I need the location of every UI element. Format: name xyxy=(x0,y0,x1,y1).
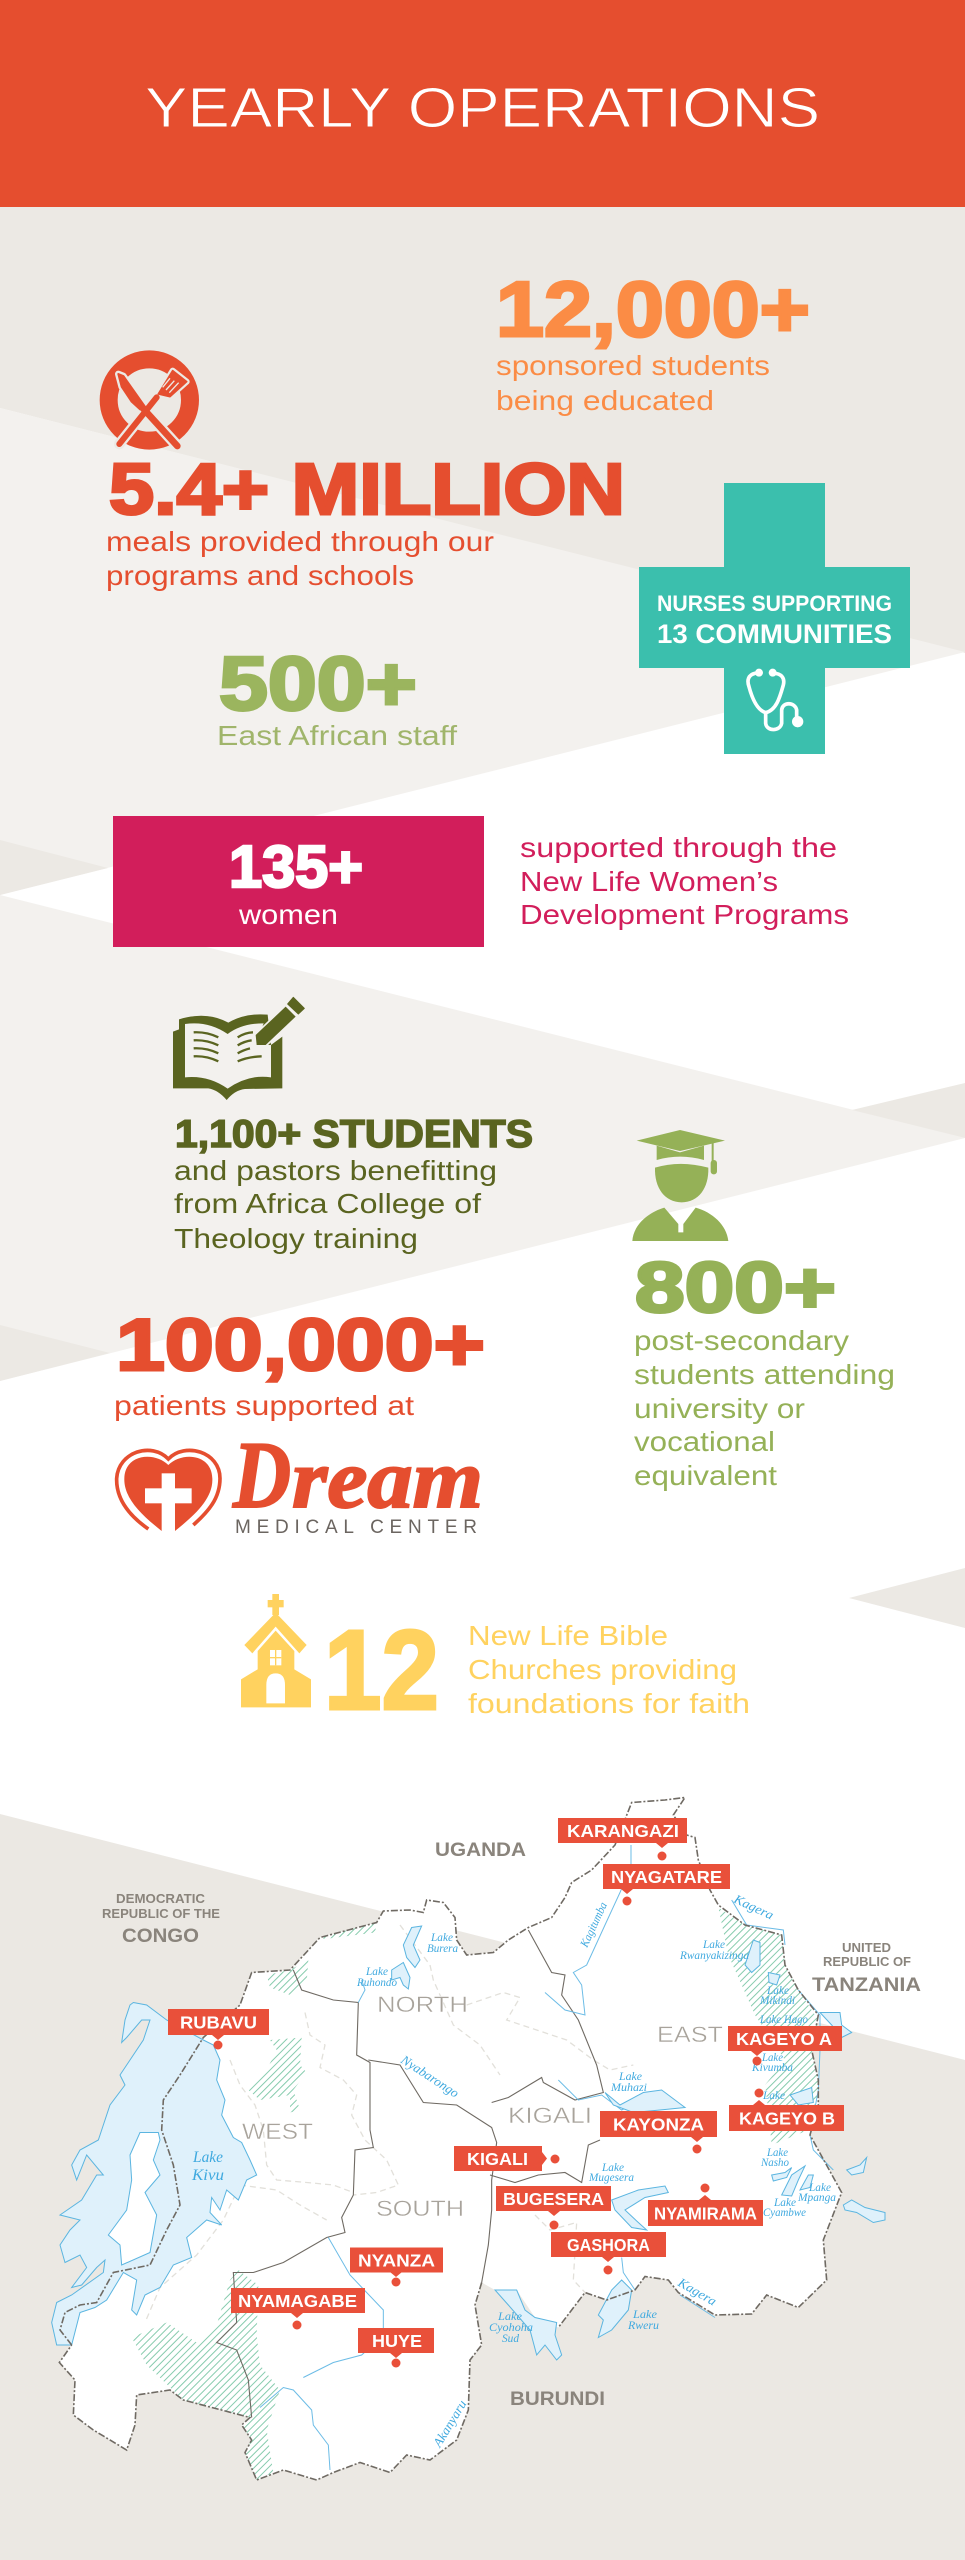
pin: Karangazi: KARANGAZI xyxy=(567,1821,679,1841)
stat: college of theology students: and pastors benefitting xyxy=(174,1155,497,1186)
text: women's programs xyxy=(520,832,849,930)
pin: Kageyo A: KAGEYO A xyxy=(736,2029,832,2049)
lake and river names: Cyohoha xyxy=(489,2320,533,2334)
stat: college of theology students: Theology training xyxy=(174,1223,418,1254)
neighbouring countries: UNITED xyxy=(842,1941,891,1955)
stat: post-secondary students: vocational xyxy=(634,1426,775,1457)
panel: nurses cross xyxy=(639,483,910,754)
pin: Kigali: KIGALI xyxy=(467,2149,528,2169)
province names: SOUTH xyxy=(376,2196,464,2221)
lake and river names: Nyabarongo xyxy=(398,2051,462,2101)
stat: college of theology students xyxy=(174,1113,533,1254)
stat: meals provided xyxy=(106,450,625,591)
lake and river names: Lake xyxy=(702,1937,726,1951)
icon: open book and pencil xyxy=(173,997,304,1100)
lake and river names: Cyambwe xyxy=(763,2205,807,2219)
stat: patients supported: patients supported at xyxy=(114,1390,414,1421)
lake and river names: Lake xyxy=(766,2145,789,2159)
header band xyxy=(0,0,965,207)
lake and river names: Rweru xyxy=(627,2318,659,2332)
protected forest and park hatching xyxy=(132,1908,818,2480)
province borders xyxy=(217,1930,603,2418)
province names: NORTH xyxy=(377,1992,468,2017)
lake and river names: Sud xyxy=(502,2331,520,2345)
small lakes xyxy=(392,1926,885,2360)
province names: WEST xyxy=(242,2119,313,2144)
stat: college of theology students: 1,100+ STUDENTS xyxy=(175,1113,533,1156)
stat: post-secondary students: students attending xyxy=(634,1359,895,1390)
neighbouring countries: CONGO xyxy=(122,1926,199,1947)
neighbouring countries: UGANDA xyxy=(435,1840,526,1861)
stat: patients supported xyxy=(114,1305,485,1421)
stat: post-secondary students: 800+ xyxy=(635,1249,836,1328)
lake and river names: Rwanyakizinga xyxy=(679,1948,749,1962)
stat: patients supported: 100,000+ xyxy=(116,1305,485,1386)
icon: stethoscope xyxy=(748,670,802,730)
stat: meals provided: 5.4+ MILLION xyxy=(109,450,625,530)
lake and river names: Kivu xyxy=(191,2167,224,2184)
rivers xyxy=(260,1845,833,2470)
stat: sponsored students: sponsored students xyxy=(496,350,770,381)
lake and river names: Lake xyxy=(766,1983,790,1997)
lake and river names: Lake xyxy=(601,2160,625,2174)
pin: Nyamirama: NYAMIRAMA xyxy=(654,2204,757,2224)
stat: East African staff xyxy=(217,642,457,751)
lake and river names: Nasho xyxy=(760,2155,789,2169)
neighbouring countries: TANZANIA xyxy=(812,1975,921,1996)
icon: church xyxy=(241,1594,311,1707)
lake and river names: Lake xyxy=(365,1964,389,1978)
stat: post-secondary students: post-secondary xyxy=(634,1325,849,1356)
pin: Gashora: GASHORA xyxy=(567,2235,650,2255)
nurses text xyxy=(657,591,892,649)
lake and river names: Lake xyxy=(808,2180,832,2194)
stat: East African staff: 500+ xyxy=(219,642,417,727)
lake and river names: Lake xyxy=(773,2195,797,2209)
lake and river names: Lake xyxy=(761,2050,784,2064)
stat: meals provided: meals provided through our xyxy=(106,526,494,557)
stat: churches: foundations for faith xyxy=(468,1688,750,1719)
pin: Gashora xyxy=(551,2232,666,2274)
land outline xyxy=(59,1798,842,2480)
lake and river names: Kagitumba xyxy=(577,1900,610,1950)
lake and river names: Kagera xyxy=(731,1891,777,1923)
lake and river names: Mugesera xyxy=(588,2170,634,2184)
lake and river names: Ruhondo xyxy=(356,1975,397,1989)
pin: Kayonza: KAYONZA xyxy=(613,2114,704,2134)
lake and river names: Akanyaru xyxy=(429,2397,470,2450)
lake and river names: Kivumba xyxy=(751,2060,793,2074)
stat: churches: Churches providing xyxy=(468,1654,737,1685)
pin: Nyamagabe xyxy=(231,2288,365,2330)
lake and river names: Lake xyxy=(497,2309,523,2323)
national border xyxy=(59,1798,842,2480)
panel: women stat box: women xyxy=(238,899,338,930)
pin: Nyagatare xyxy=(603,1864,730,1906)
map: Rwanda xyxy=(52,1798,885,2480)
logo wordmark: ream xyxy=(292,1433,483,1526)
lake and river names: Lake xyxy=(430,1930,454,1944)
neighbouring countries: DEMOCRATIC xyxy=(116,1892,205,1906)
pin: Huye xyxy=(358,2328,434,2368)
icon: graduate xyxy=(632,1130,728,1241)
lake and river names: Burera xyxy=(427,1941,458,1955)
neighbouring countries: BURUNDI xyxy=(510,2389,605,2410)
nurses text: 13 COMMUNITIES xyxy=(657,619,892,649)
panel: women stat box: 135+ xyxy=(229,834,363,900)
district dashed lines xyxy=(145,1925,633,2322)
pin: Kageyo B: KAGEYO B xyxy=(739,2108,835,2128)
text: women's programs: New Life Women’s xyxy=(520,866,778,897)
neighbouring countries xyxy=(102,1840,921,2410)
text: women's programs: Development Programs xyxy=(520,899,849,930)
stat: sponsored students: being educated xyxy=(496,385,714,416)
lake and river names: Lake xyxy=(762,2088,786,2102)
pin: Kigali xyxy=(454,2146,560,2171)
location pins xyxy=(168,1818,844,2368)
lake and river names: Lake xyxy=(192,2149,223,2166)
panel: women stat box xyxy=(113,816,484,947)
pin: Kageyo B xyxy=(729,2088,844,2131)
stat: post-secondary students: university or xyxy=(634,1393,805,1424)
lake and river names: Lake Hago xyxy=(759,2012,808,2026)
pin: Bugesera: BUGESERA xyxy=(503,2189,604,2209)
stat: sponsored students xyxy=(496,265,810,416)
pin: Nyanza: NYANZA xyxy=(358,2250,435,2270)
province names: KIGALI xyxy=(508,2103,592,2128)
stat: post-secondary students: equivalent xyxy=(634,1460,777,1491)
neighbouring countries: REPUBLIC OF THE xyxy=(102,1907,220,1921)
province names xyxy=(242,1992,723,2221)
lake and river names xyxy=(191,1891,836,2450)
pin: Huye: HUYE xyxy=(372,2331,422,2351)
stat: sponsored students: 12,000+ xyxy=(496,265,810,353)
pin: Kageyo A xyxy=(728,2026,842,2066)
lake and river names: Mpanga xyxy=(797,2190,836,2204)
nurses text: NURSES SUPPORTING xyxy=(657,591,892,616)
province names: EAST xyxy=(657,2022,723,2047)
stat: post-secondary students xyxy=(634,1249,895,1491)
pin: Bugesera xyxy=(496,2186,611,2230)
lake and river names: Lake xyxy=(618,2069,643,2083)
neighbouring countries: REPUBLIC OF xyxy=(823,1955,911,1969)
Lake Kivu xyxy=(52,2002,257,2345)
pin: Kayonza xyxy=(600,2111,717,2154)
stat: East African staff: East African staff xyxy=(217,720,457,751)
pin: Rubavu xyxy=(168,2009,269,2050)
stat: college of theology students: from Africa College of xyxy=(174,1188,481,1219)
lake and river names: Mikindi xyxy=(759,1993,795,2007)
logo wordmark: D xyxy=(232,1422,291,1528)
pin: Nyagatare: NYAGATARE xyxy=(611,1867,722,1887)
text: women's programs: supported through the xyxy=(520,832,837,863)
lake and river names: Kagera xyxy=(675,2274,720,2309)
icon: heart with cross xyxy=(117,1450,220,1532)
stat: churches xyxy=(324,1607,750,1733)
pin: Nyamagabe: NYAMAGABE xyxy=(238,2291,357,2311)
lake and river names: Lake xyxy=(632,2307,658,2321)
logo wordmark xyxy=(232,1422,483,1528)
logo: Dream Medical Center: MEDICAL CENTER xyxy=(235,1517,477,1538)
icon: plate with knife and fork xyxy=(109,359,190,446)
logo: Dream Medical Center xyxy=(117,1422,483,1538)
Idjwi island xyxy=(108,2132,160,2265)
pin: Nyanza xyxy=(350,2248,443,2286)
stat: churches: 12 xyxy=(324,1607,439,1733)
stat: churches: New Life Bible xyxy=(468,1620,668,1651)
stat: meals provided: programs and schools xyxy=(106,560,414,591)
title: YEARLY OPERATIONS xyxy=(145,76,820,140)
lake and river names: Muhazi xyxy=(610,2080,647,2094)
pin: Karangazi xyxy=(558,1818,687,1860)
pin: Nyamirama xyxy=(648,2184,763,2226)
pin: Rubavu: RUBAVU xyxy=(180,2012,257,2032)
